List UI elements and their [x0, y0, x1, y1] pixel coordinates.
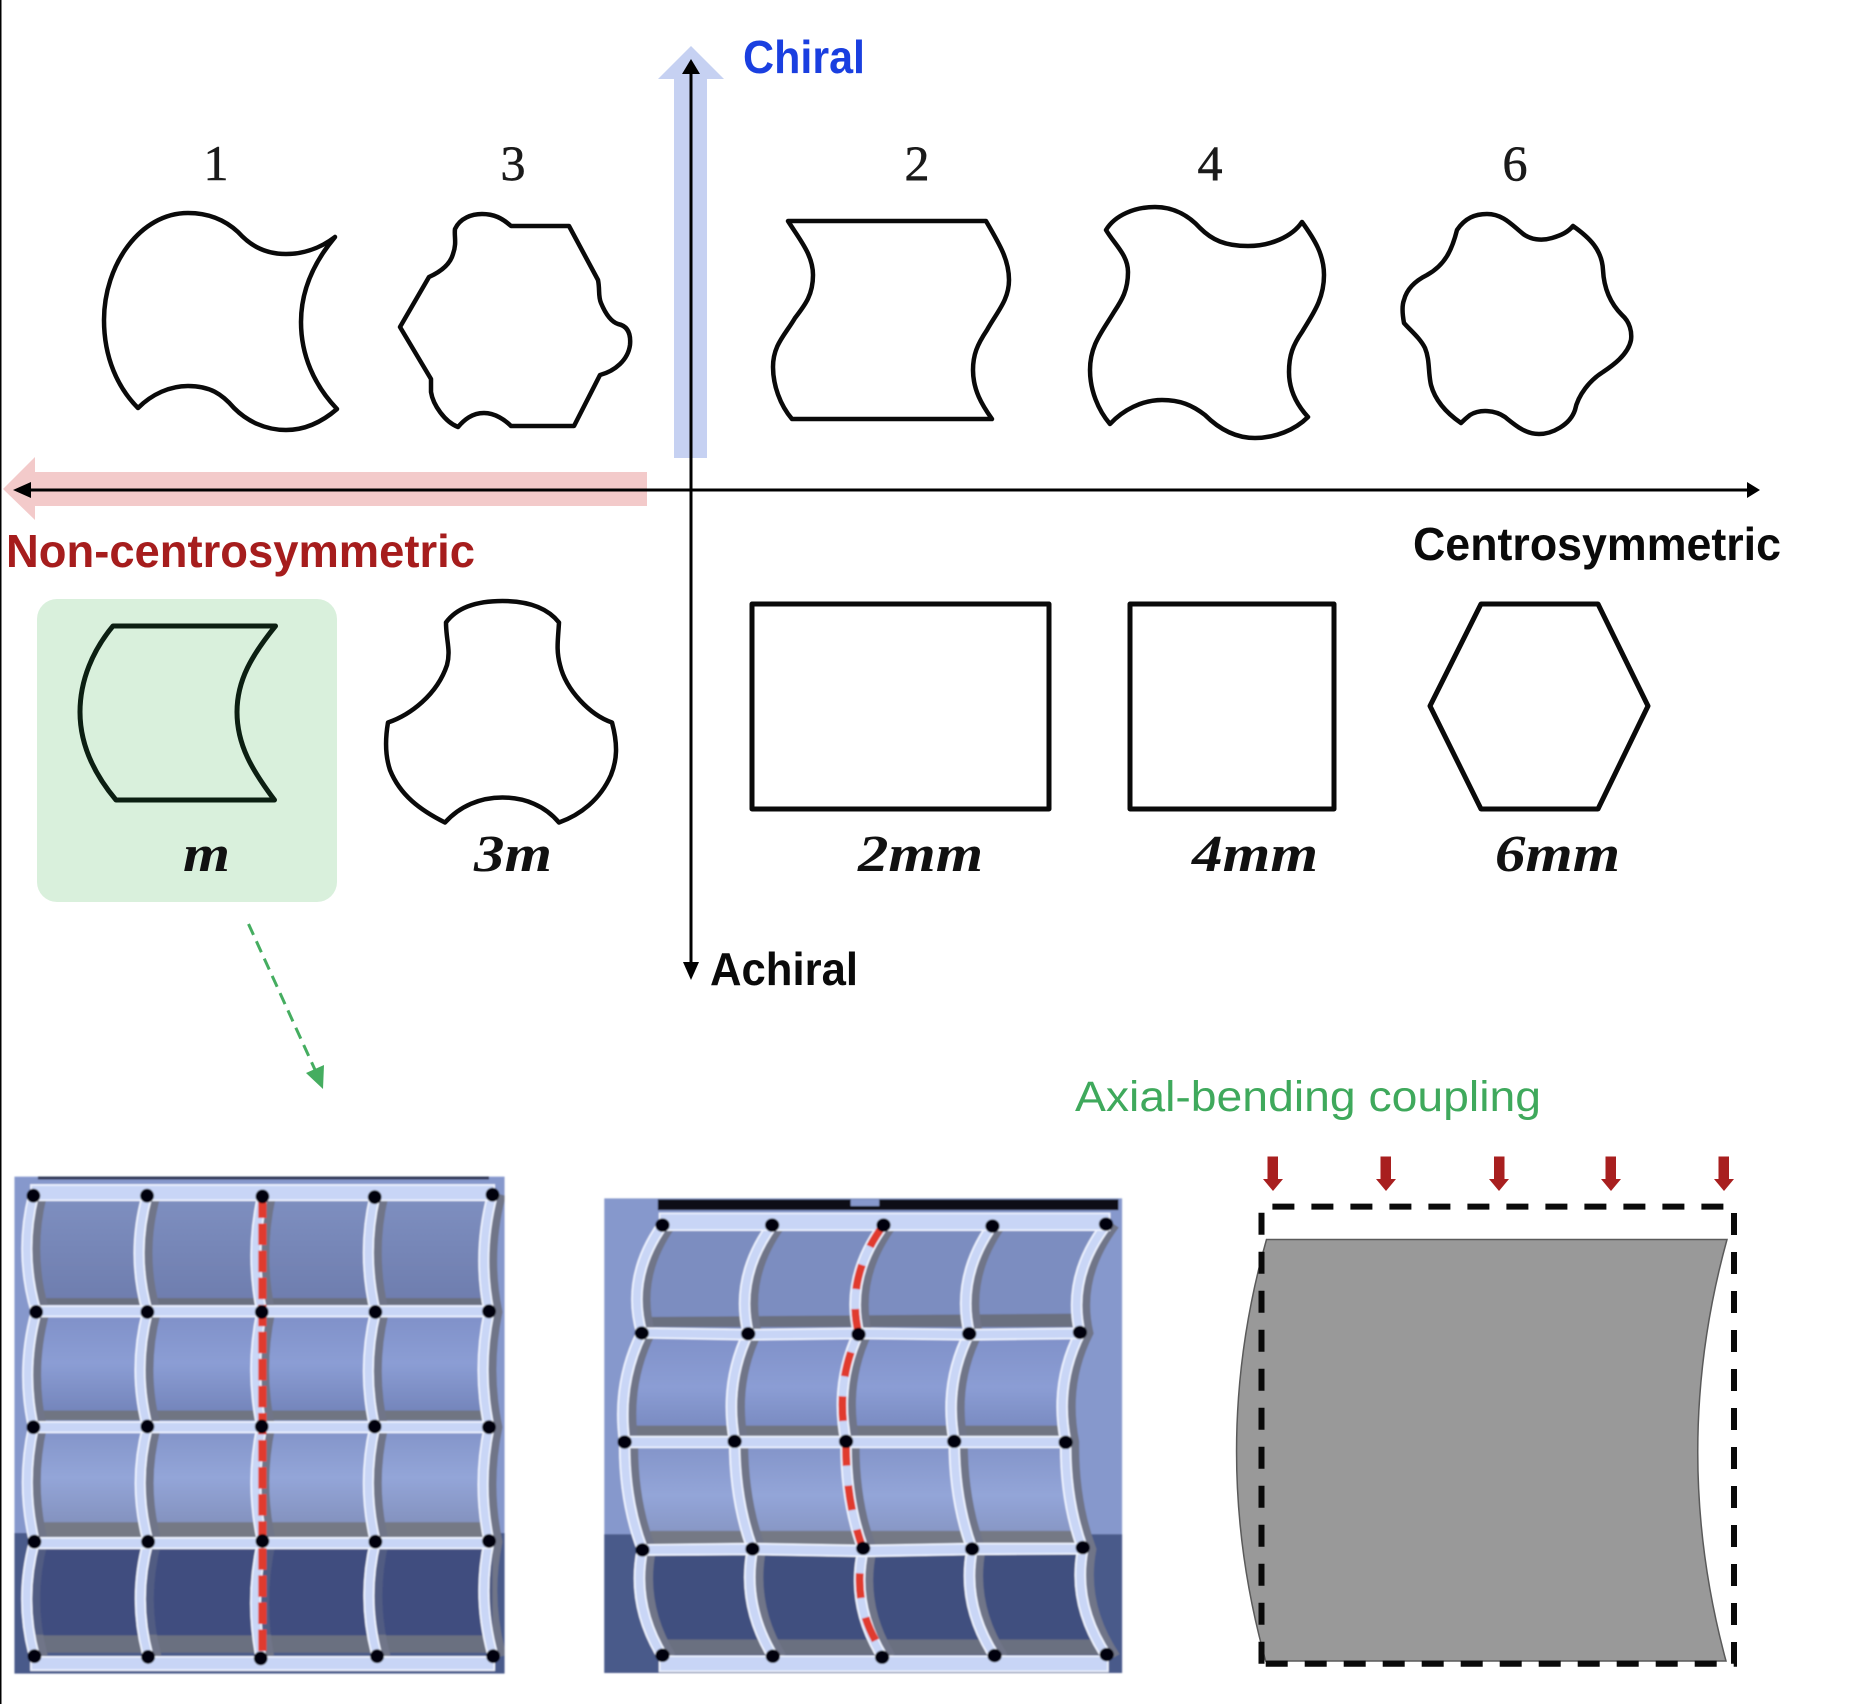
shape: point group 6 — [1402, 214, 1631, 434]
diagram: axial-bending deformation — [1237, 1156, 1734, 1664]
left edge line — [0, 0, 2, 1704]
horizontal axis arrow — [13, 482, 1760, 498]
red dashed deformed line — [842, 1225, 884, 1651]
shape: point group 2 — [773, 221, 1009, 419]
number 1: 1 — [204, 135, 228, 191]
label: 2mm: 2mm — [857, 826, 983, 883]
deformed lattice node markers — [617, 1217, 1114, 1664]
axis band: chiral direction — [658, 46, 724, 458]
deformed lattice horizontal bars — [625, 1213, 1110, 1671]
deformed grey cell — [1237, 1240, 1727, 1661]
label: Axial-bending coupling: Axial-bending coupling — [1075, 1073, 1541, 1121]
label: 4mm: 4mm — [1191, 826, 1318, 883]
photo: deformed lattice — [604, 1198, 1122, 1673]
shape: point group 3m — [386, 601, 616, 822]
lattice node markers — [27, 1188, 500, 1665]
shape: hexagon 6mm — [1430, 604, 1648, 809]
label: Chiral: Chiral — [743, 31, 865, 83]
shape: point group 3 — [400, 214, 630, 427]
label: m: m — [183, 826, 230, 883]
shape: rectangle 2mm — [752, 604, 1049, 809]
number 4: 4 — [1198, 135, 1222, 191]
shape: point group m — [80, 626, 276, 800]
vertical axis arrow — [682, 59, 700, 980]
shape: point group 4 — [1090, 207, 1324, 438]
red dashed centre line — [250, 1196, 274, 1657]
shape: square 4mm — [1130, 604, 1334, 809]
number 2: 2 — [904, 135, 930, 191]
label: 6mm: 6mm — [1495, 826, 1620, 883]
photo: undeformed lattice — [14, 1177, 505, 1674]
lattice horizontal bars — [31, 1185, 494, 1670]
arrow: dashed green link from m group to photo — [248, 924, 324, 1089]
red load arrows — [1263, 1156, 1734, 1191]
label: Centrosymmetric: Centrosymmetric — [1413, 518, 1781, 570]
shape: point group 1 — [104, 213, 337, 430]
label: Non-centrosymmetric: Non-centrosymmetric — [6, 525, 475, 577]
number 3: 3 — [500, 135, 526, 191]
label: 3m: 3m — [473, 826, 552, 883]
undeformed dashed outline — [1262, 1207, 1734, 1664]
axis band: non-centrosymmetric direction — [3, 457, 647, 520]
label: Achiral: Achiral — [710, 943, 858, 995]
number 6: 6 — [1502, 135, 1528, 191]
panel: highlighted m group — [37, 599, 337, 902]
